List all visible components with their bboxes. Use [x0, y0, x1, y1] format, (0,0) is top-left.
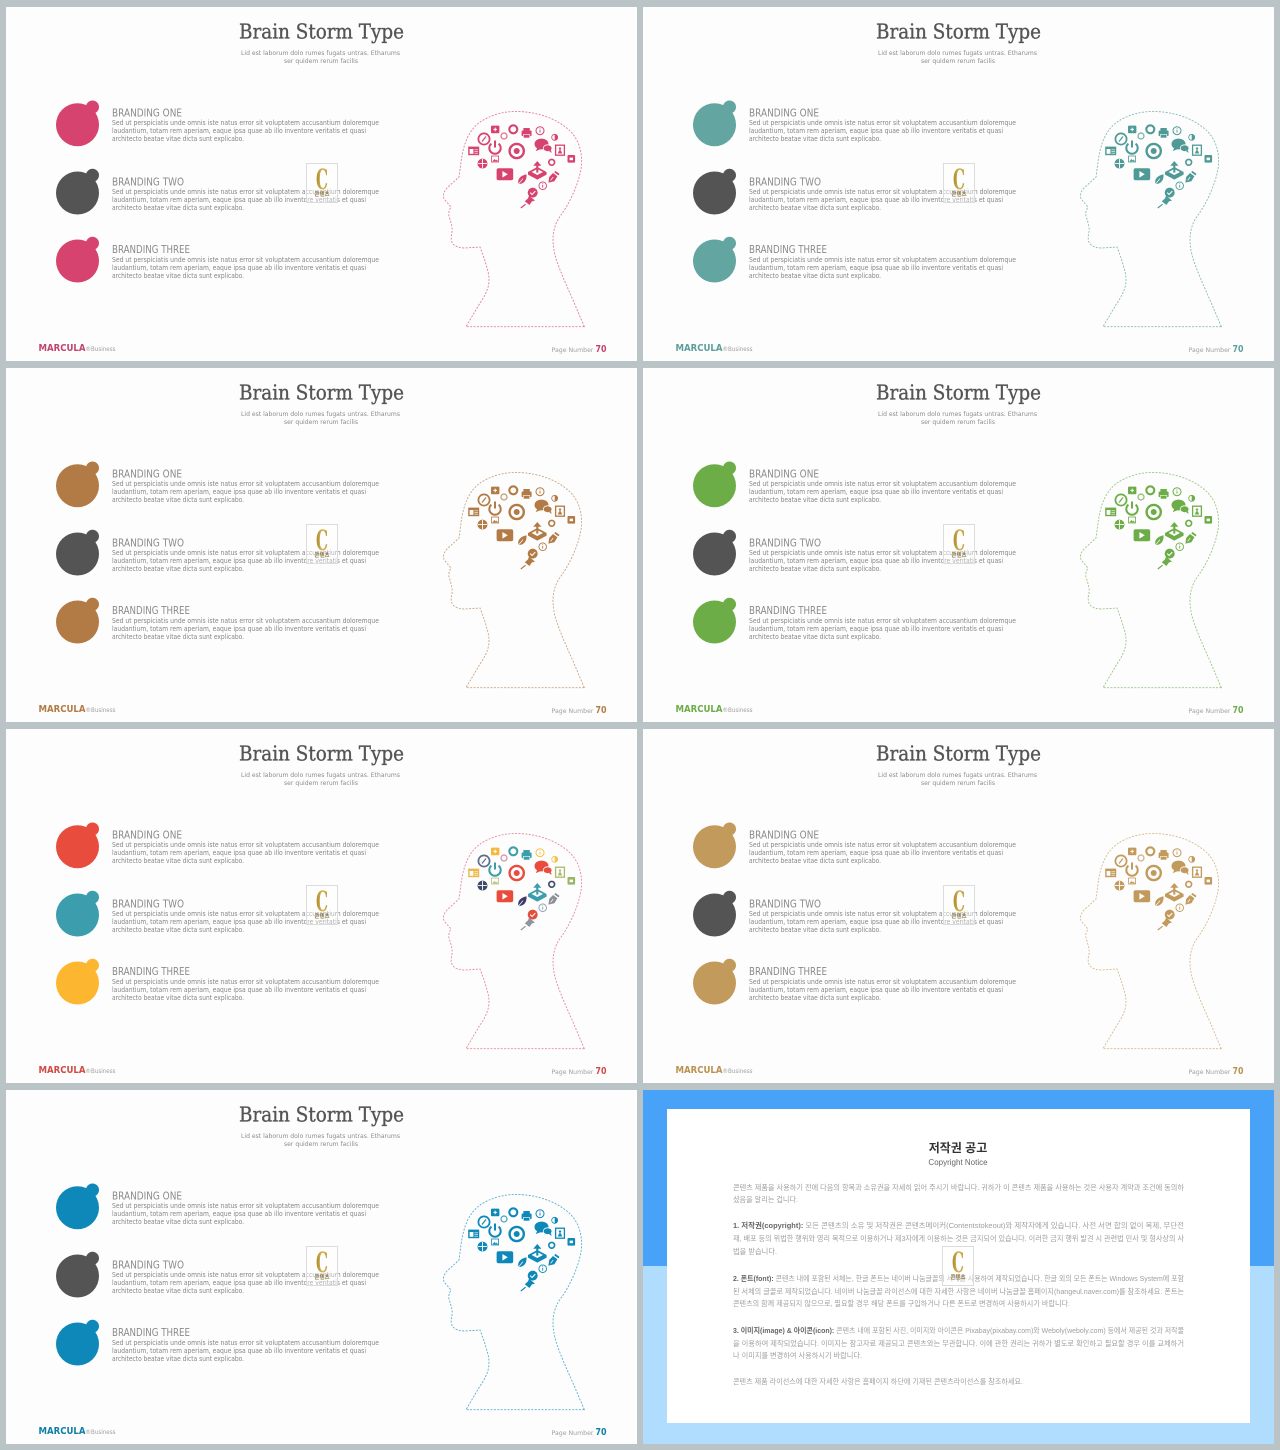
text block: branding two: BRANDING TWO — [749, 538, 821, 550]
panel: slide 5 multicolour — [6, 729, 637, 1083]
page number: 70 — [1232, 1066, 1244, 1077]
icon: blob one — [56, 100, 99, 146]
text block: branding three — [112, 605, 379, 641]
text block: branding one: laudantium, totam rem aperiam, eaque ipsa quae ab illo inventore veritatis et quasi — [749, 127, 1003, 135]
subtitle: Lid est laborum dolo rumes fugats untras. Etharums — [878, 49, 1038, 57]
text block: branding two: Sed ut perspiciatis unde omnis iste natus error sit voluptatem accusantium doloremque — [112, 188, 379, 196]
page number: Page Number — [552, 1430, 594, 1437]
icon: blob three — [56, 237, 99, 282]
text block: branding two: laudantium, totam rem aperiam, eaque ipsa quae ab illo inventore veritatis et quasi — [112, 1279, 366, 1287]
text block: branding one — [749, 108, 1016, 143]
subtitle: ser quidem rerum facilis — [921, 779, 996, 787]
text block: branding two: Sed ut perspiciatis unde omnis iste natus error sit voluptatem accusantium doloremque — [749, 549, 1016, 557]
text block: branding three: laudantium, totam rem aperiam, eaque ipsa quae ab illo inventore veritatis et quasi — [749, 986, 1003, 994]
page number: Page Number — [552, 347, 594, 354]
footer logo — [38, 343, 116, 354]
icon: head with brain icons — [443, 472, 584, 688]
text block: branding two: Sed ut perspiciatis unde omnis iste natus error sit voluptatem accusantium doloremque — [112, 549, 379, 557]
text block: branding two: laudantium, totam rem aperiam, eaque ipsa quae ab illo inventore veritatis et quasi — [749, 557, 1003, 565]
text block: branding two: laudantium, totam rem aperiam, eaque ipsa quae ab illo inventore veritatis et quasi — [112, 918, 366, 926]
subtitle: ser quidem rerum facilis — [921, 57, 996, 65]
footer logo: ®Business — [722, 346, 752, 353]
text block: branding one: BRANDING ONE — [749, 108, 819, 120]
text block: branding two: Sed ut perspiciatis unde omnis iste natus error sit voluptatem accusantium doloremque — [112, 910, 379, 918]
text block: branding one: architecto beatae vitae dicta sunt explicabo. — [112, 135, 244, 143]
watermark — [306, 1246, 338, 1286]
title: Brain Storm Type — [239, 380, 404, 404]
subtitle — [878, 771, 1038, 787]
title: Brain Storm Type — [239, 742, 404, 766]
text block: branding two: BRANDING TWO — [112, 1260, 184, 1272]
text block: branding three: architecto beatae vitae dicta sunt explicabo. — [112, 1355, 244, 1363]
icon: blob three — [693, 237, 736, 282]
text block: branding three: architecto beatae vitae dicta sunt explicabo. — [112, 272, 244, 280]
text block: branding three: BRANDING THREE — [112, 1327, 190, 1339]
text block: branding three: laudantium, totam rem aperiam, eaque ipsa quae ab illo inventore veritatis et quasi — [112, 625, 366, 633]
footer logo — [38, 704, 116, 715]
text block: branding three: Sed ut perspiciatis unde omnis iste natus error sit voluptatem accusantium doloremque — [112, 978, 379, 986]
text block: branding one: Sed ut perspiciatis unde omnis iste natus error sit voluptatem accusantium doloremque — [112, 119, 379, 127]
panel: slide 3 brown — [6, 368, 637, 722]
text block: branding one: BRANDING ONE — [112, 108, 182, 120]
page number — [1188, 344, 1244, 355]
icon: blob one — [56, 462, 99, 507]
watermark — [306, 524, 338, 564]
text block: branding one: architecto beatae vitae dicta sunt explicabo. — [112, 496, 244, 504]
subtitle — [878, 49, 1038, 65]
footer logo — [38, 1065, 116, 1076]
text block: branding one: laudantium, totam rem aperiam, eaque ipsa quae ab illo inventore veritatis et quasi — [749, 849, 1003, 857]
panel: slide 1 pink — [6, 7, 637, 361]
text block: branding one: laudantium, totam rem aperiam, eaque ipsa quae ab illo inventore veritatis et quasi — [112, 1210, 366, 1218]
text block: branding two: Sed ut perspiciatis unde omnis iste natus error sit voluptatem accusantium doloremque — [112, 1271, 379, 1279]
footer logo — [676, 704, 752, 715]
footer logo: MARCULA — [38, 1065, 86, 1076]
subtitle: ser quidem rerum facilis — [284, 779, 359, 787]
text block: branding three: Sed ut perspiciatis unde omnis iste natus error sit voluptatem accusantium doloremque — [112, 1339, 379, 1347]
text block: branding two: architecto beatae vitae dicta sunt explicabo. — [112, 1287, 244, 1295]
page number — [1188, 1066, 1244, 1077]
subtitle: ser quidem rerum facilis — [284, 418, 359, 426]
page number — [552, 1066, 607, 1077]
icon: blob two — [56, 1252, 99, 1298]
text block: branding three: Sed ut perspiciatis unde omnis iste natus error sit voluptatem accusantium doloremque — [112, 617, 379, 625]
text block: branding one — [749, 468, 1016, 504]
text block: branding one: Sed ut perspiciatis unde omnis iste natus error sit voluptatem accusantium doloremque — [749, 119, 1016, 127]
title: Brain Storm Type — [876, 742, 1041, 766]
text block: branding two: laudantium, totam rem aperiam, eaque ipsa quae ab illo inventore veritatis et quasi — [112, 557, 366, 565]
subtitle: ser quidem rerum facilis — [284, 1140, 359, 1148]
page number: Page Number — [552, 708, 594, 715]
text block: branding three: laudantium, totam rem aperiam, eaque ipsa quae ab illo inventore veritatis et quasi — [749, 625, 1003, 633]
text block: branding one: architecto beatae vitae dicta sunt explicabo. — [112, 1218, 244, 1226]
panel: slide 7 blue — [6, 1090, 637, 1444]
page number: Page Number — [552, 1069, 594, 1076]
footer logo: MARCULA — [38, 1426, 86, 1437]
icon: blob two — [56, 891, 99, 936]
text block: branding two: architecto beatae vitae dicta sunt explicabo. — [112, 204, 244, 212]
icon: blob one — [693, 100, 736, 146]
text block: branding three: BRANDING THREE — [112, 244, 190, 256]
subtitle: Lid est laborum dolo rumes fugats untras. Etharums — [241, 49, 401, 57]
page number: Page Number — [1188, 1069, 1231, 1076]
text block: branding one — [112, 468, 379, 504]
panel: slide 4 green — [643, 368, 1274, 722]
watermark — [944, 524, 974, 564]
footer logo: ®Business — [86, 346, 116, 353]
notice intro — [733, 1182, 1184, 1204]
page number: Page Number — [1188, 708, 1231, 715]
text block: branding two: BRANDING TWO — [749, 176, 821, 188]
text block: branding three: BRANDING THREE — [112, 966, 190, 978]
page number — [552, 705, 607, 716]
icon: head with brain icons — [1080, 472, 1221, 688]
text block: branding one — [112, 830, 379, 865]
notice subheading: Copyright Notice — [928, 1158, 988, 1167]
text block: branding one: architecto beatae vitae dicta sunt explicabo. — [749, 857, 881, 865]
subtitle: Lid est laborum dolo rumes fugats untras. Etharums — [241, 1132, 401, 1140]
icon: blob three — [693, 598, 736, 644]
text block: branding two: Sed ut perspiciatis unde omnis iste natus error sit voluptatem accusantium doloremque — [749, 910, 1016, 918]
notice intro: 셨음을 알리는 겁니다. — [733, 1194, 798, 1204]
notice heading: 저작권 공고 — [929, 1140, 987, 1155]
page number: Page Number — [1188, 347, 1231, 354]
icon: head with brain icons — [443, 1194, 584, 1410]
text block: branding one: BRANDING ONE — [112, 1190, 182, 1202]
text block: branding three — [749, 244, 1016, 280]
notice item 3: 3. 이미지(image) & 아이콘(icon): 콘텐츠 내에 포함된 사진, 이미지와 아이콘은 Pixabay(pixabay.com)와 Weboly(weboly.com) 등에서 제공된 것과 저작물 — [733, 1325, 1184, 1335]
text block: branding one: laudantium, totam rem aperiam, eaque ipsa quae ab illo inventore veritatis et quasi — [749, 488, 1003, 496]
footer logo: ®Business — [86, 1068, 116, 1075]
text block: branding one: BRANDING ONE — [112, 830, 182, 842]
text block: branding two: Sed ut perspiciatis unde omnis iste natus error sit voluptatem accusantium doloremque — [749, 188, 1016, 196]
text block: branding two: BRANDING TWO — [749, 898, 821, 910]
panel: copyright notice slide — [643, 1090, 1274, 1444]
subtitle: ser quidem rerum facilis — [284, 57, 359, 65]
subtitle — [878, 410, 1038, 426]
text block: branding three: BRANDING THREE — [749, 966, 827, 978]
text block: branding one: Sed ut perspiciatis unde omnis iste natus error sit voluptatem accusantium doloremque — [749, 480, 1016, 488]
text block: branding three: Sed ut perspiciatis unde omnis iste natus error sit voluptatem accusantium doloremque — [749, 617, 1016, 625]
text block: branding one: Sed ut perspiciatis unde omnis iste natus error sit voluptatem accusantium doloremque — [112, 1202, 379, 1210]
icon: blob one — [56, 822, 99, 868]
footer logo: MARCULA — [676, 1065, 723, 1076]
text block: branding one: laudantium, totam rem aperiam, eaque ipsa quae ab illo inventore veritatis et quasi — [112, 127, 366, 135]
text block: branding one: BRANDING ONE — [749, 468, 819, 480]
icon: blob one — [56, 1184, 99, 1229]
text block: branding one: laudantium, totam rem aperiam, eaque ipsa quae ab illo inventore veritatis et quasi — [112, 488, 366, 496]
notice intro: 콘텐츠 제품을 사용하기 전에 다음의 항목과 소유권을 자세히 읽어 주시기 바랍니다. 귀하가 이 콘텐츠 제품을 사용하는 것은 사용자 계약과 조건에 동의하 — [733, 1182, 1184, 1192]
notice item 1: 재, 배포 등의 위법한 행위와 영리 목적으로 이용하거나 제3자에게 이용하는 것은 금지되어 있습니다. 이러한 금지 행위 발견 시 관련법 민사 및 형사상의 사 — [733, 1233, 1184, 1243]
page number — [552, 1427, 607, 1438]
text block: branding three — [749, 966, 1016, 1002]
icon: head with multicoloured brain icons — [443, 833, 584, 1049]
icon: blob three — [56, 959, 99, 1004]
subtitle — [241, 49, 401, 65]
subtitle: Lid est laborum dolo rumes fugats untras. Etharums — [241, 410, 401, 418]
text block: branding three — [112, 244, 379, 280]
page number: 70 — [596, 1427, 607, 1438]
text block: branding three: architecto beatae vitae dicta sunt explicabo. — [749, 272, 881, 280]
icon: blob three — [693, 959, 736, 1004]
panel: slide 6 tan — [643, 729, 1274, 1083]
footer logo: MARCULA — [676, 343, 723, 354]
footer logo — [676, 343, 752, 354]
icon: blob three — [56, 1320, 99, 1366]
subtitle: Lid est laborum dolo rumes fugats untras. Etharums — [241, 771, 401, 779]
notice item 1: 법을 받습니다. — [733, 1246, 777, 1256]
text block: branding one: Sed ut perspiciatis unde omnis iste natus error sit voluptatem accusantium doloremque — [749, 841, 1016, 849]
text block: branding one: laudantium, totam rem aperiam, eaque ipsa quae ab illo inventore veritatis et quasi — [112, 849, 366, 857]
footer logo: ®Business — [722, 1068, 752, 1075]
text block: branding three: architecto beatae vitae dicta sunt explicabo. — [749, 633, 881, 641]
text block: branding two — [749, 898, 1016, 934]
icon: head with brain icons — [443, 111, 584, 327]
page number: 70 — [596, 705, 607, 716]
icon: blob two — [56, 530, 99, 576]
notice item 2 — [733, 1273, 1184, 1308]
notice item 1: 1. 저작권(copyright): 모든 콘텐츠의 소유 및 저작권은 콘텐츠메이커(Contentstokeout)와 제작자에게 있습니다. 사전 서면 합의 없이 복제, 무단전 — [733, 1220, 1184, 1230]
watermark — [306, 163, 338, 202]
notice item 2: 2. 폰트(font): 콘텐츠 내에 포함된 서체는, 한글 폰트는 네이버 나눔글꼴의 서체를 사용하여 제작되었습니다. 한글 외의 모든 폰트는 Windows System에 포함 — [733, 1273, 1184, 1283]
subtitle: ser quidem rerum facilis — [921, 418, 996, 426]
text block: branding two: architecto beatae vitae dicta sunt explicabo. — [749, 204, 881, 212]
footer logo: ®Business — [86, 707, 116, 714]
page number: 70 — [1232, 705, 1244, 716]
text block: branding two — [749, 176, 1016, 212]
text block: branding two: BRANDING TWO — [112, 176, 184, 188]
text block: branding one: BRANDING ONE — [749, 830, 819, 842]
text block: branding one — [112, 108, 379, 143]
notice item 2: 된 서체의 글꼴로 제작되었습니다. 네이버 나눔글꼴 라이선스에 대한 자세한 사항은 네이버 나눔글꼴 홈페이지(hangeul.naver.com)를 참조하세요. 폰트는 — [733, 1286, 1184, 1296]
notice item 1 — [733, 1220, 1184, 1256]
text block: branding two: laudantium, totam rem aperiam, eaque ipsa quae ab illo inventore veritatis et quasi — [749, 918, 1003, 926]
text block: branding three: architecto beatae vitae dicta sunt explicabo. — [112, 633, 244, 641]
icon: blob two — [693, 891, 736, 936]
text block: branding two — [749, 538, 1016, 573]
icon: blob one — [693, 822, 736, 868]
footer logo: MARCULA — [38, 343, 86, 354]
notice item 3 — [733, 1325, 1184, 1360]
text block: branding three — [749, 605, 1016, 641]
icon: blob three — [56, 598, 99, 644]
text block: branding two — [112, 538, 379, 573]
text block: branding three: BRANDING THREE — [749, 244, 827, 256]
footer logo — [676, 1065, 752, 1076]
text block: branding two: laudantium, totam rem aperiam, eaque ipsa quae ab illo inventore veritatis et quasi — [749, 196, 1003, 204]
page number: 70 — [596, 1066, 607, 1077]
text block: branding two — [112, 176, 379, 212]
notice item 3: 나 이미지를 변경하여 사용하시기 바랍니다. — [733, 1350, 862, 1360]
text block: branding two: BRANDING TWO — [112, 538, 184, 550]
text block: branding three: laudantium, totam rem aperiam, eaque ipsa quae ab illo inventore veritatis et quasi — [112, 1347, 366, 1355]
text block: branding three: BRANDING THREE — [112, 605, 190, 617]
page number — [1188, 705, 1244, 716]
subtitle — [241, 410, 401, 426]
title: Brain Storm Type — [876, 20, 1041, 44]
text block: branding three: laudantium, totam rem aperiam, eaque ipsa quae ab illo inventore veritatis et quasi — [749, 264, 1003, 272]
notice closing: 콘텐츠 제품 라이선스에 대한 자세한 사항은 홈페이지 하단에 기재된 콘텐츠라이선스를 참조하세요. — [733, 1376, 1023, 1386]
footer logo: MARCULA — [38, 704, 86, 715]
text block: branding two: laudantium, totam rem aperiam, eaque ipsa quae ab illo inventore veritatis et quasi — [112, 196, 366, 204]
notice item 3: 을 이용하여 제작되었습니다. 이미지는 참고자료 제공되고 콘텐츠와는 무관합니다. 이에 관한 권리는 귀하가 별도로 확인하고 필요할 경우 이를 교체하거 — [733, 1338, 1184, 1348]
text block: branding two: architecto beatae vitae dicta sunt explicabo. — [749, 926, 881, 934]
notice item 2: 콘텐츠의 함께 제공되지 않으므로, 필요할 경우 해당 폰트를 구입하거나 다른 폰트로 변경하여 사용하시기 바랍니다. — [733, 1298, 1070, 1308]
text block: branding one: architecto beatae vitae dicta sunt explicabo. — [112, 857, 244, 865]
footer logo: ®Business — [86, 1429, 116, 1436]
title: Brain Storm Type — [239, 20, 404, 44]
text block: branding one: BRANDING ONE — [112, 468, 182, 480]
text block: branding two — [112, 1260, 379, 1295]
icon: head with brain icons — [1080, 111, 1221, 327]
page number — [552, 344, 607, 355]
text block: branding three — [112, 966, 379, 1002]
title: Brain Storm Type — [876, 380, 1041, 404]
text block: branding three: laudantium, totam rem aperiam, eaque ipsa quae ab illo inventore veritatis et quasi — [112, 986, 366, 994]
text block: branding one: Sed ut perspiciatis unde omnis iste natus error sit voluptatem accusantium doloremque — [112, 480, 379, 488]
text block: branding one: architecto beatae vitae dicta sunt explicabo. — [749, 496, 881, 504]
text block: branding three — [112, 1327, 379, 1363]
subtitle: Lid est laborum dolo rumes fugats untras. Etharums — [878, 771, 1038, 779]
subtitle — [241, 1132, 401, 1148]
page number: 70 — [596, 344, 607, 355]
text block: branding three: architecto beatae vitae dicta sunt explicabo. — [112, 994, 244, 1002]
text block: branding one — [749, 830, 1016, 865]
panel: slide 2 teal — [643, 7, 1274, 361]
watermark — [944, 885, 974, 924]
icon: blob two — [56, 169, 99, 214]
text block: branding three: architecto beatae vitae dicta sunt explicabo. — [749, 994, 881, 1002]
text block: branding three: Sed ut perspiciatis unde omnis iste natus error sit voluptatem accusantium doloremque — [112, 256, 379, 264]
text block: branding one — [112, 1190, 379, 1226]
text block: branding one: architecto beatae vitae dicta sunt explicabo. — [749, 135, 881, 143]
watermark — [942, 1246, 974, 1286]
text block: branding three: Sed ut perspiciatis unde omnis iste natus error sit voluptatem accusantium doloremque — [749, 256, 1016, 264]
text block: branding two: architecto beatae vitae dicta sunt explicabo. — [112, 565, 244, 573]
icon: blob one — [693, 462, 736, 507]
page number: 70 — [1232, 344, 1244, 355]
watermark — [306, 885, 338, 924]
icon: blob two — [693, 169, 736, 214]
text block: branding two: BRANDING TWO — [112, 898, 184, 910]
subtitle — [241, 771, 401, 787]
text block: branding three: BRANDING THREE — [749, 605, 827, 617]
text block: branding three: laudantium, totam rem aperiam, eaque ipsa quae ab illo inventore veritatis et quasi — [112, 264, 366, 272]
text block: branding one: Sed ut perspiciatis unde omnis iste natus error sit voluptatem accusantium doloremque — [112, 841, 379, 849]
icon: blob two — [693, 530, 736, 576]
footer logo: MARCULA — [676, 704, 723, 715]
notice card — [667, 1109, 1250, 1423]
subtitle: Lid est laborum dolo rumes fugats untras. Etharums — [878, 410, 1038, 418]
watermark — [944, 163, 974, 202]
text block: branding two — [112, 898, 379, 934]
icon: head with brain icons — [1080, 833, 1221, 1049]
text block: branding two: architecto beatae vitae dicta sunt explicabo. — [112, 926, 244, 934]
text block: branding two: architecto beatae vitae dicta sunt explicabo. — [749, 565, 881, 573]
footer logo: ®Business — [722, 707, 752, 714]
text block: branding three: Sed ut perspiciatis unde omnis iste natus error sit voluptatem accusantium doloremque — [749, 978, 1016, 986]
footer logo — [38, 1426, 116, 1437]
title: Brain Storm Type — [239, 1102, 404, 1126]
